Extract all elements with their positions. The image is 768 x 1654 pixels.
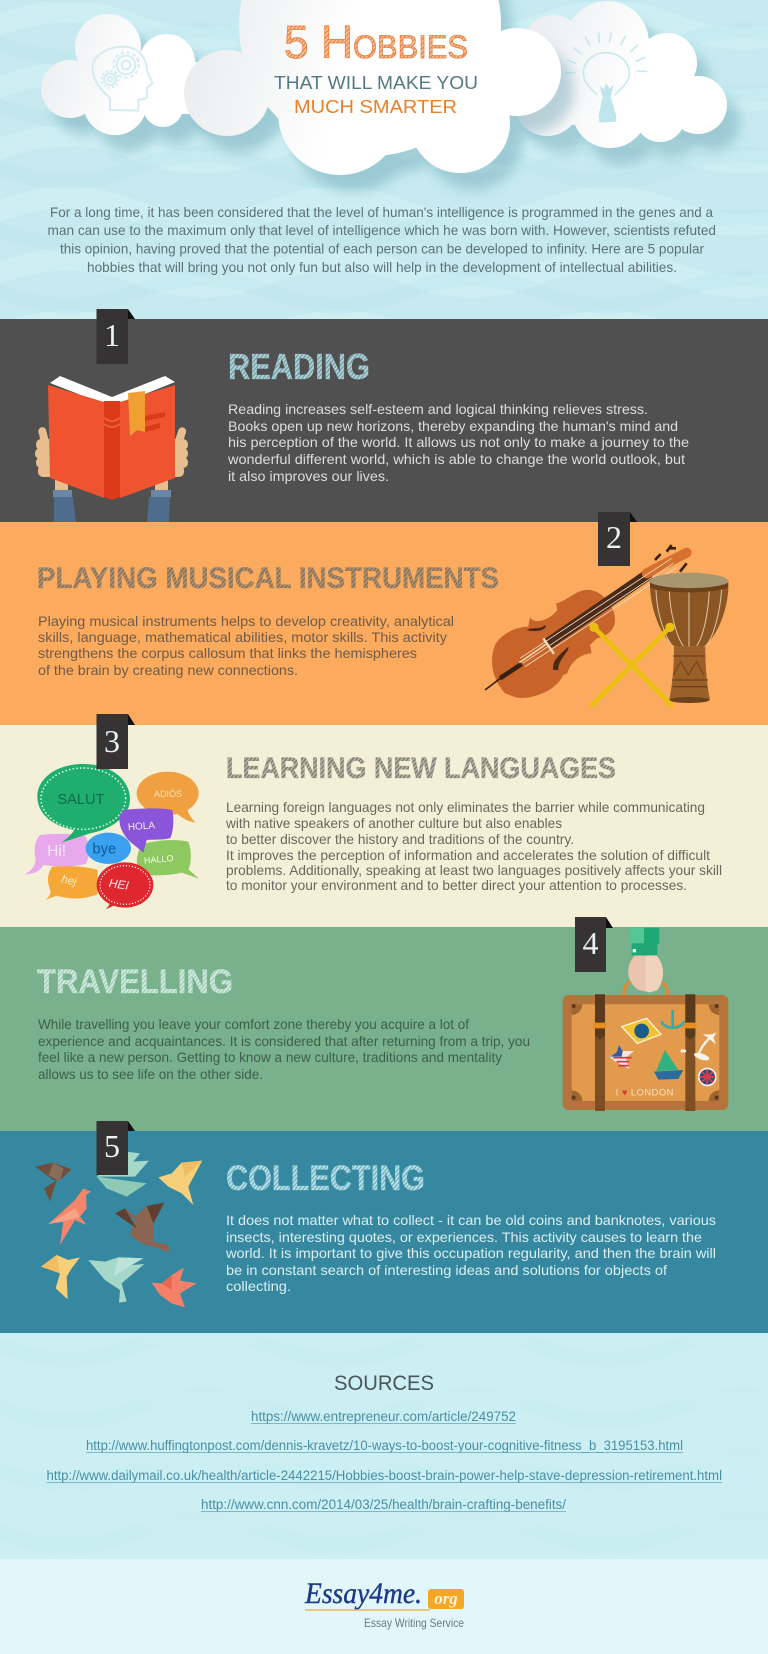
bubble: hei: HEI (108, 876, 130, 893)
text: reading: it also improves our lives. (228, 468, 389, 484)
icon: head and gears (93, 47, 153, 111)
sticker: anchor (662, 1010, 684, 1028)
text: collecting: insects, interesting quotes, or experiences. This activity causes to learn the (226, 1229, 702, 1245)
text: learning new languages: to better discover the history and traditions of the country. (226, 831, 574, 847)
text: reading: Reading increases self-esteem and logical thinking relieves stress. (228, 401, 648, 417)
bubble: hei (97, 862, 153, 909)
bubble: hi (25, 834, 89, 874)
intro paragraph: this opinion, having proved that the potential of each person can be developed to infinity. Here are 5 popular (60, 240, 704, 256)
text: playing musical instruments (38, 613, 454, 678)
tag: number 3: 3 (104, 723, 120, 759)
icon: open book held by hands (35, 376, 188, 522)
sticker: usa star (609, 1045, 634, 1069)
bubble: adios (137, 772, 199, 823)
heading: learning new languages: LEARNING NEW LANGUAGES (226, 752, 616, 785)
bird: coral bottom (152, 1268, 197, 1307)
bubble: hej: hej (60, 874, 78, 889)
heading: sources: SOURCES (334, 1372, 434, 1395)
tag: number 2 (598, 512, 637, 566)
bird: yellow top (158, 1161, 202, 1205)
cloud: main title cloud (184, 0, 561, 175)
cloud: head with gears (41, 14, 205, 135)
sticker: i love london: I ♥ LONDON (616, 1088, 673, 1098)
icon: violin and drum (485, 545, 729, 705)
icon: hand with suitcase (563, 928, 728, 1111)
text: travelling: experience and acquaintances. It is considered that after returning from a trip, you (38, 1033, 530, 1049)
text: playing musical instruments: Playing musical instruments helps to develop creativity, analytical (38, 613, 454, 629)
text: travelling: allows us to see life on the other side. (38, 1066, 263, 1082)
bubble: salut (37, 764, 130, 843)
tag: number 5 (96, 1121, 135, 1175)
source links: http://www.huffingtonpost.com/dennis-kravetz/10-ways-to-boost-your-cognitive-fitness_b_3195153.html (86, 1438, 683, 1453)
text: travelling: While travelling you leave your comfort zone thereby you acquire a lot of (38, 1016, 469, 1032)
panel: learning new languages (0, 714, 768, 927)
text: playing musical instruments: skills, language, mathematical abilities, motor skills. This activity (38, 629, 447, 645)
icon: speech bubbles (25, 764, 199, 909)
subtitle line 2: MUCH SMARTER (294, 96, 457, 117)
bird: brown large (115, 1203, 169, 1253)
heading: collecting: COLLECTING (226, 1159, 425, 1198)
logo: org (434, 1589, 458, 1608)
heading: travelling: TRAVELLING (37, 963, 233, 1001)
intro paragraph: For a long time, it has been considered that the level of human's intelligence is programmed in the genes and a (50, 204, 713, 220)
bird: coral (48, 1188, 91, 1245)
bubble: hi: Hi! (47, 843, 66, 860)
panel: travelling (0, 917, 768, 1131)
heading: reading: READING (228, 346, 370, 387)
bird: yellow bottom (41, 1255, 80, 1299)
bubble: hallo: HALLO (144, 853, 174, 866)
title: 5 HOBBIES (284, 16, 468, 68)
source links: http://www.cnn.com/2014/03/25/health/brain-crafting-benefits/ (201, 1497, 566, 1512)
text: collecting: world. It is important to give this occupation regularity, and then the brain will (225, 1245, 716, 1261)
bird: mint top (97, 1152, 149, 1197)
source links: https://www.entrepreneur.com/article/249752 (251, 1409, 516, 1424)
icon: light bulb (565, 33, 647, 123)
panel: footer (0, 1559, 768, 1654)
bird: mint bottom (88, 1257, 144, 1303)
sticker: uk badge (698, 1068, 717, 1086)
bubble: hola (119, 808, 173, 853)
tag: number 4 (575, 917, 613, 972)
text: learning new languages: It improves the perception of information and accelerates the solution of difficult (226, 847, 710, 863)
tag: number 5: 5 (104, 1128, 120, 1164)
heading: playing musical instruments: PLAYING MUSICAL INSTRUMENTS (37, 562, 499, 595)
source links: http://www.dailymail.co.uk/health/article-2442215/Hobbies-boost-brain-power-help-stave-depression-retirement.html (46, 1468, 722, 1483)
text: travelling (38, 1016, 530, 1082)
tag: number 1 (96, 309, 135, 364)
subtitle line 1: THAT WILL MAKE YOU (274, 72, 478, 93)
bubble: hallo (137, 840, 199, 879)
panel: collecting (0, 1121, 768, 1333)
text: collecting: be in constant search of interesting ideas and solutions for objects of (226, 1262, 667, 1278)
logo: Essay4me. (304, 1577, 422, 1610)
text: learning new languages: Learning foreign languages not only eliminates the barrier while communicating (226, 799, 705, 815)
bubble: bye: bye (93, 841, 116, 857)
intro paragraph: hobbies that will bring you not only fun but also will help in the development of intellectual abilities. (87, 259, 677, 275)
intro paragraph: man can use to the maximum only that level of intelligence which he was born with. However, scientists refuted (48, 222, 716, 238)
text: collecting: It does not matter what to collect - it can be old coins and banknotes, various (226, 1212, 716, 1228)
sticker: palm (680, 1032, 717, 1062)
tag: number 1: 1 (104, 317, 120, 353)
icon: origami birds (35, 1152, 202, 1307)
text: reading: his perception of the world. It allows us not only to make a journey to the (228, 434, 689, 450)
cloud: light bulb (514, 1, 727, 148)
panel: playing musical instruments (0, 512, 768, 725)
tag: number 4: 4 (582, 925, 598, 961)
panel: reading (0, 309, 768, 522)
text: playing musical instruments: of the brain by creating new connections. (38, 662, 298, 678)
sticker: sailboat (654, 1050, 683, 1080)
text: reading (227, 401, 689, 484)
text: reading: wonderful different world, which is able to change the world outlook, but (227, 451, 685, 467)
header background (0, 0, 768, 319)
text: learning new languages: to monitor your environment and to better direct your attention to processes. (226, 877, 687, 893)
tag: number 2: 2 (606, 519, 622, 555)
source links (46, 1409, 722, 1512)
text: playing musical instruments: strengthens the corpus callosum that links the hemispheres (38, 645, 417, 661)
text: reading: Books open up new horizons, thereby expanding the human's mind and (228, 418, 678, 434)
sticker: brazil flag (622, 1018, 661, 1043)
text: learning new languages: with native speakers of another culture but also enables (225, 815, 562, 831)
text: collecting: collecting. (226, 1278, 291, 1294)
bubble: bye (86, 833, 131, 864)
bubble: hola: HOLA (128, 820, 156, 833)
text: learning new languages: problems. Additionally, speaking at least two languages positively affects your skill (226, 862, 722, 878)
tagline: Essay Writing Service (364, 1616, 464, 1630)
bubble: salut: SALUT (57, 792, 105, 808)
tag: number 3 (96, 714, 135, 769)
panel: sources (0, 1333, 768, 1559)
bird: brown small (35, 1163, 72, 1202)
text: collecting (225, 1212, 716, 1294)
bubble: adios: ADIÓS (154, 789, 182, 799)
intro paragraph (48, 204, 716, 275)
bubble: hej (45, 866, 98, 900)
text: travelling: feel like a new person. Getting to know a new culture, traditions and mentality (38, 1049, 502, 1065)
text: learning new languages (225, 799, 722, 893)
